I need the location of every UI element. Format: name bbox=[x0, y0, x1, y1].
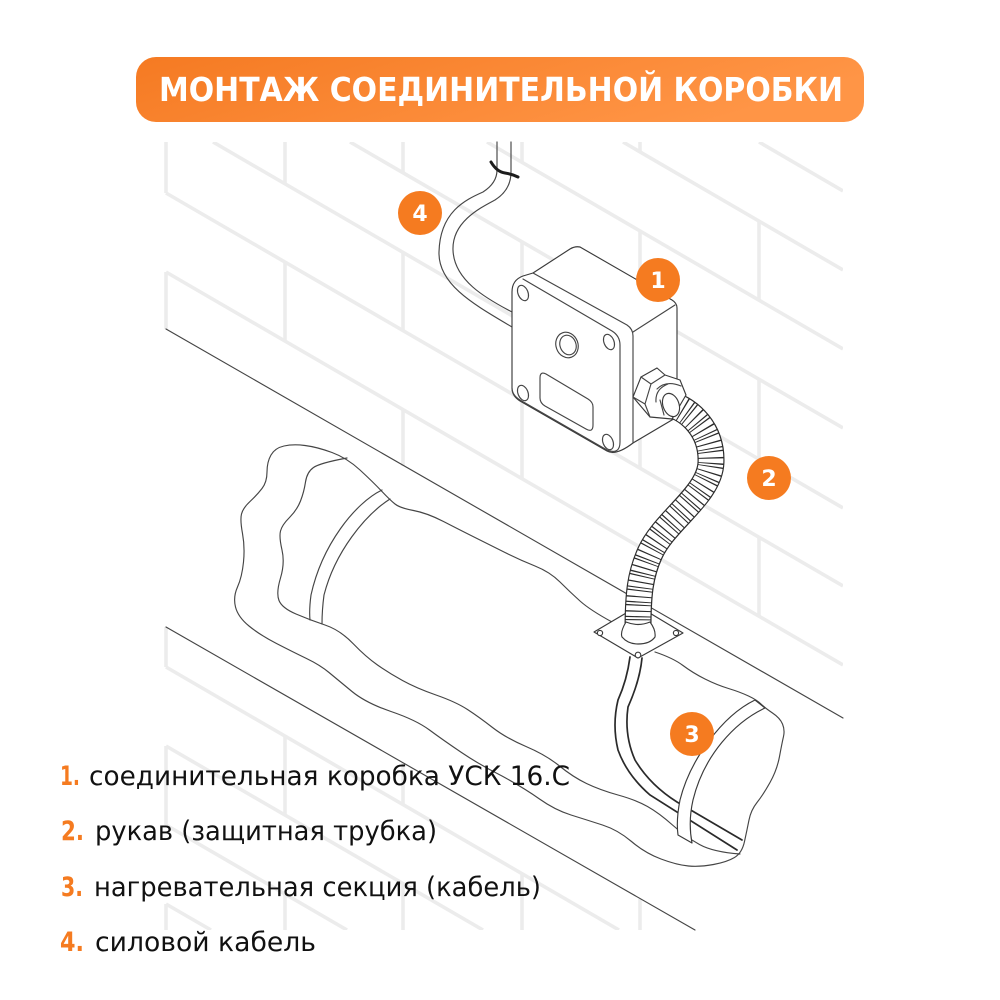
right pipe ring bbox=[677, 700, 765, 843]
sleeve flange bbox=[622, 622, 655, 644]
badge 4: 4 bbox=[412, 202, 428, 227]
badge 2 bbox=[747, 456, 791, 500]
legend item 3: 3. bbox=[61, 872, 83, 903]
label plate bbox=[540, 373, 593, 430]
legend item 1: 1. bbox=[60, 761, 80, 792]
screw holes bbox=[515, 284, 531, 302]
legend item 4: силовой кабель bbox=[95, 927, 316, 958]
mounting plate bbox=[594, 606, 683, 658]
pipe with insulation bbox=[235, 445, 784, 866]
badge 3: 3 bbox=[684, 723, 700, 748]
cable gland bbox=[633, 368, 686, 419]
insulation outer outline bbox=[235, 445, 784, 866]
left pipe ring bbox=[310, 490, 390, 624]
brick wall background bbox=[166, 142, 843, 930]
legend item 4: 4. bbox=[60, 927, 84, 958]
junction box bbox=[512, 247, 677, 452]
indicator button bbox=[552, 329, 582, 361]
title banner: МОНТАЖ СОЕДИНИТЕЛЬНОЙ КОРОБКИ bbox=[159, 69, 843, 109]
cable tie bbox=[491, 162, 518, 177]
wall-floor ridge lines bbox=[166, 329, 843, 930]
legend bbox=[60, 761, 570, 958]
badge 3 bbox=[670, 712, 714, 756]
legend item 3: нагревательная секция (кабель) bbox=[94, 872, 541, 903]
badge 4 bbox=[398, 191, 442, 235]
corrugated sleeve bbox=[638, 404, 711, 630]
legend item 2: рукав (защитная трубка) bbox=[95, 816, 437, 847]
title banner bbox=[136, 57, 864, 122]
insulation inner edge bbox=[278, 458, 740, 854]
power cable bbox=[439, 142, 518, 327]
heating cable bbox=[615, 657, 742, 850]
badge 1: 1 bbox=[650, 269, 666, 294]
badge 2: 2 bbox=[761, 467, 777, 492]
legend item 1: соединительная коробка УСК 16.С bbox=[89, 761, 570, 792]
front panel bbox=[512, 279, 620, 451]
badge 1 bbox=[636, 258, 680, 302]
legend item 2: 2. bbox=[61, 816, 84, 847]
